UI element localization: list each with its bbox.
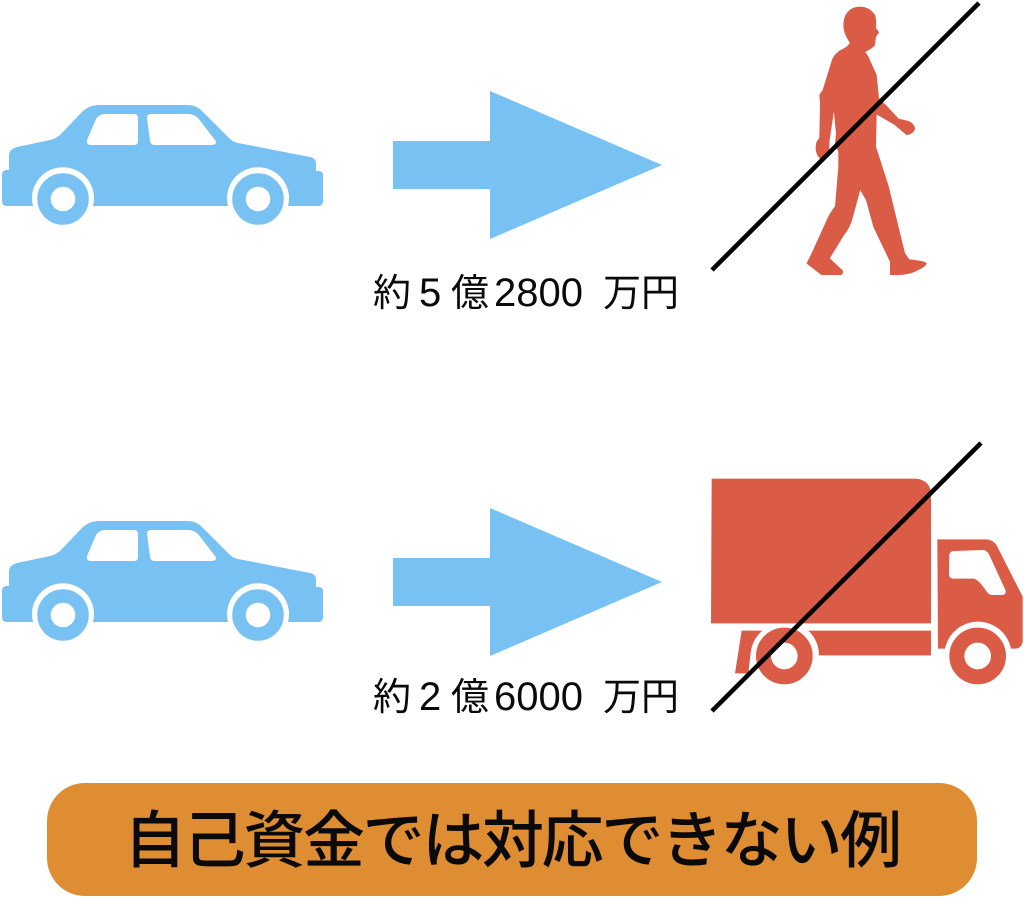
label: top row amount: 約 [373, 273, 411, 315]
banner text: 自己資金では対応できない例 [124, 807, 902, 876]
cross-out line [712, 443, 981, 711]
label: bottom row amount: 2 [419, 675, 441, 719]
label: top row amount: 万円 [603, 273, 679, 315]
banner: conclusion [47, 783, 977, 896]
label: bottom row amount: 6000 [494, 675, 583, 719]
truck silhouette [711, 479, 1023, 677]
icon: crossed-out walking person [712, 3, 979, 274]
icon: crossed-out truck [711, 443, 1023, 711]
person silhouette [807, 7, 926, 274]
label: top row amount [373, 271, 679, 315]
icon: blue car (bottom row) [2, 521, 323, 634]
arrow: bottom row [393, 508, 662, 656]
label: top row amount: 5 [419, 271, 441, 315]
banner background [47, 783, 977, 896]
label: bottom row amount: 万円 [603, 677, 679, 719]
icon: blue car (top row) [2, 105, 323, 218]
arrow: top row [393, 91, 662, 239]
label: bottom row amount: 億 [451, 677, 489, 719]
label: top row amount: 億 [451, 273, 489, 315]
label: top row amount: 2800 [494, 271, 583, 315]
label: bottom row amount: 約 [373, 677, 411, 719]
label: bottom row amount [373, 675, 679, 719]
cross-out line [712, 3, 979, 270]
